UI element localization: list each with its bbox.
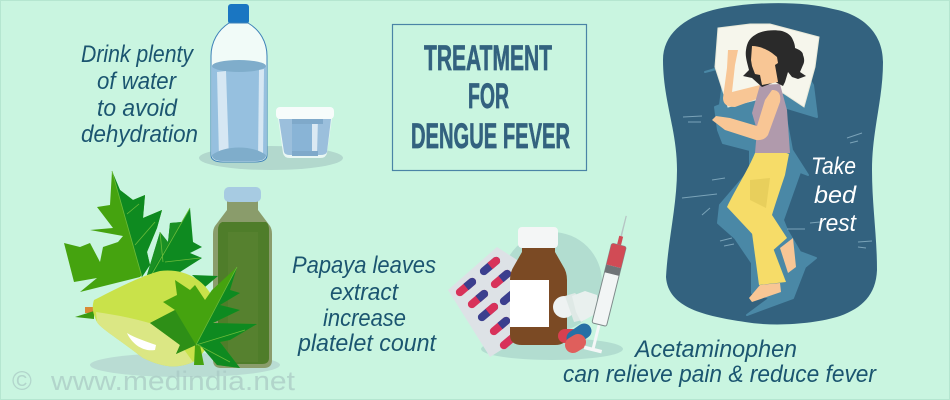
woman: upper leg and hips	[727, 151, 789, 253]
title box: TREATMENT	[424, 39, 552, 78]
woman: lower leg	[752, 233, 786, 285]
woman: raised arm	[723, 50, 762, 107]
text: take bed rest: Take	[811, 153, 856, 180]
panel: acetaminophen illustration	[448, 214, 635, 360]
woman: sleeveless top	[752, 84, 790, 153]
icon: syringe	[584, 214, 635, 353]
woman: lower foot	[749, 283, 781, 302]
icon: medicine bottle	[510, 227, 567, 345]
panel: drinking water illustration	[199, 4, 343, 170]
text: papaya leaves extract	[292, 252, 437, 357]
icon: water bottle	[211, 4, 267, 162]
pillow	[715, 24, 819, 107]
woman: back foot	[780, 238, 796, 273]
text: drink water: to avoid	[97, 95, 178, 122]
watermark: ©	[12, 366, 32, 396]
text: drink water: of water	[97, 68, 177, 95]
icon: large papaya leaf	[64, 171, 162, 292]
woman: front arm	[712, 90, 780, 140]
watermark: www.medindia.net	[50, 366, 296, 396]
text: take bed rest: rest	[818, 210, 857, 237]
icon: glass of water	[276, 107, 334, 158]
icon: right papaya leaf	[147, 208, 218, 287]
bed shape	[663, 3, 883, 324]
text: take bed rest: bed	[814, 182, 857, 209]
panel: blue bed with sleeping woman	[663, 3, 883, 324]
text: take bed rest	[811, 153, 857, 237]
woman: face and neck	[751, 46, 778, 85]
text: drink water: dehydration	[81, 121, 198, 148]
icon: broken tablets	[553, 291, 597, 322]
title box: FOR	[468, 77, 509, 116]
sheet folds	[705, 50, 817, 315]
text: papaya leaves extract: increase	[323, 305, 406, 332]
text: acetaminophen: Acetaminophen	[633, 336, 797, 363]
text: papaya leaves extract: extract	[330, 279, 399, 306]
text: acetaminophen: can relieve pain & reduce fever	[563, 361, 877, 388]
bed crease marks	[682, 116, 872, 248]
text: drink water	[81, 41, 198, 148]
woman: hair	[743, 30, 806, 87]
text: drink water: Drink plenty	[81, 41, 195, 68]
icon: juice bottle	[213, 187, 272, 368]
title box	[392, 24, 586, 170]
woman: pants fold	[750, 178, 770, 208]
panel: papaya and leaf extract illustration	[64, 171, 280, 377]
icon: capsule	[565, 331, 584, 345]
text: papaya leaves extract: platelet count	[297, 330, 437, 357]
icon: papaya fruit	[75, 271, 215, 366]
title box: DENGUE FEVER	[411, 117, 570, 156]
icon: front papaya leaf	[150, 267, 257, 368]
text: acetaminophen	[563, 336, 877, 388]
text: papaya leaves extract: Papaya leaves	[292, 252, 436, 279]
icon: blister pack	[448, 247, 525, 357]
